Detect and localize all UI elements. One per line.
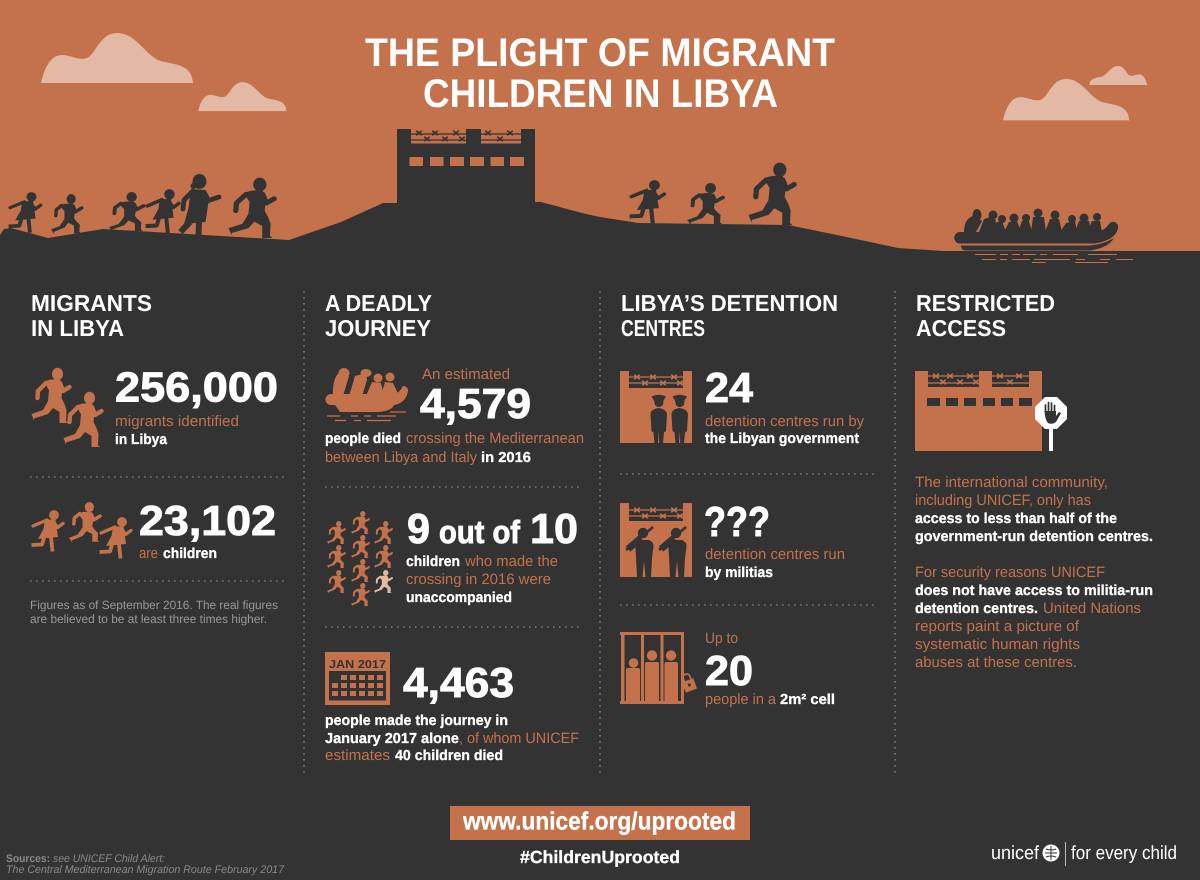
stat: 24: the Libyan government <box>705 431 859 447</box>
heading: a deadly journey: JOURNEY <box>325 315 431 341</box>
cloud: small right <box>1089 66 1147 85</box>
text: access limits: government-run detention centres. <box>915 529 1153 545</box>
stat: unknown: ??? <box>704 498 770 545</box>
stat: unknown: by militias <box>705 565 773 581</box>
stat: 24 <box>705 364 864 447</box>
text: access limits <box>915 474 1153 545</box>
panel: Libya's detention centres <box>620 290 864 708</box>
title <box>365 31 835 116</box>
heading: migrants in Libya: MIGRANTS <box>31 290 152 316</box>
unicef logo <box>991 842 1177 866</box>
icon: militia <box>620 503 692 577</box>
stat: 9 out of 10 <box>406 505 578 606</box>
text: security: United Nations <box>1043 600 1141 617</box>
stat: 20: 20 <box>705 647 753 694</box>
running family left <box>9 174 274 238</box>
icon: three running children <box>32 502 131 558</box>
url banner: www.unicef.org/uprooted <box>462 808 736 836</box>
stat: 24: 24 <box>705 364 754 411</box>
icon: small boat <box>326 368 408 420</box>
stat: unknown: detention centres run <box>705 546 845 563</box>
text: security: reports paint a picture of <box>915 618 1080 635</box>
stat: 4,463: estimates <box>325 747 390 764</box>
stat: 23,102 <box>139 497 276 562</box>
sources: The Central Mediterranean Migration Route February 2017 <box>6 864 285 876</box>
migrant boat <box>954 208 1133 262</box>
stat: 4,579: crossing the Mediterranean <box>406 430 584 447</box>
text: security: For security reasons UNICEF <box>915 564 1105 581</box>
stat: 24: detention centres run by <box>705 413 864 430</box>
column dividers <box>30 291 895 775</box>
stat: 20: people in a <box>705 691 777 708</box>
stat: unknown <box>704 498 845 581</box>
heading: restricted access: ACCESS <box>916 315 1006 341</box>
text: security: detention centres. <box>915 601 1038 617</box>
hashtag: #ChildrenUprooted <box>520 847 680 867</box>
stat: 4,463: 4,463 <box>403 659 514 706</box>
stat: 256,000: in Libya <box>115 432 168 448</box>
heading: detention centres <box>621 290 838 341</box>
icon: fortress with stop sign <box>915 371 1067 451</box>
stat: 4,579 <box>325 366 584 466</box>
title: CHILDREN IN LIBYA <box>423 72 778 116</box>
note: figures <box>30 598 278 626</box>
stat: 4,463: , of whom UNICEF <box>459 730 579 747</box>
cloud: large right <box>1003 79 1129 120</box>
stat: 23,102: 23,102 <box>139 497 276 544</box>
sources: Sources: <box>6 853 50 865</box>
stat: 4,463: people made the journey in <box>325 713 508 729</box>
panel: a deadly journey <box>325 290 584 764</box>
stat: 9 out of 10: children <box>406 554 460 570</box>
text: security: abuses at these centres. <box>915 654 1077 671</box>
text: security <box>915 564 1153 671</box>
text: security: systematic human rights <box>915 636 1080 653</box>
heading: detention centres: CENTRES <box>621 315 705 341</box>
sources: see UNICEF Child Alert: <box>53 853 165 865</box>
sky panel <box>0 0 1200 251</box>
stat: 23,102: children <box>163 546 217 562</box>
heading: a deadly journey <box>325 290 432 341</box>
text: access limits: The international community, <box>915 474 1108 491</box>
text: access limits: access to less than half of the <box>915 511 1117 527</box>
stat: 4,579: An estimated <box>422 366 510 383</box>
stat: 20 <box>705 630 835 708</box>
icon: two running adults <box>32 368 102 447</box>
heading: restricted access <box>916 290 1055 341</box>
running family right <box>630 163 794 225</box>
unicef logo: for every child <box>1071 843 1177 864</box>
stat: 4,579: in 2016 <box>481 450 531 466</box>
stat: 20: Up to <box>705 630 738 647</box>
note: figures: are believed to be at least three times higher. <box>30 612 267 626</box>
stat: 4,463 <box>325 659 579 764</box>
stat: 9 out of 10: 10 <box>530 505 578 552</box>
heading: migrants in Libya <box>31 290 152 341</box>
stat: 9 out of 10: 9 <box>407 505 430 552</box>
sources <box>6 853 285 876</box>
stat: 4,579: between Libya and Italy <box>325 449 477 466</box>
stat: 9 out of 10: out of <box>439 514 520 550</box>
stat: 9 out of 10: crossing in 2016 were <box>406 571 551 588</box>
title: THE PLIGHT OF MIGRANT <box>365 31 835 75</box>
cloud: small left <box>198 82 286 111</box>
heading: a deadly journey: A DEADLY <box>325 290 432 316</box>
stat: 256,000: migrants identified <box>115 413 239 430</box>
icon: calendar: JAN 2017 <box>329 659 386 671</box>
panel: restricted access <box>915 290 1153 671</box>
note: figures: Figures as of September 2016. The real figures <box>30 598 278 612</box>
stat: 4,463: 40 children died <box>395 748 503 764</box>
heading: restricted access: RESTRICTED <box>916 290 1055 316</box>
icon: calendar <box>325 652 390 705</box>
stat: 4,579: people died <box>325 431 401 447</box>
stat: 4,579: 4,579 <box>420 380 531 427</box>
stat: 20: 2m² cell <box>780 692 835 708</box>
cloud: large left <box>41 33 193 83</box>
unicef logo: unicef <box>991 843 1040 864</box>
stat: 256,000 <box>115 364 278 448</box>
text: security: does not have access to militia-run <box>915 583 1153 599</box>
stat: 9 out of 10: unaccompanied <box>406 590 512 606</box>
stat: 4,463: January 2017 alone <box>325 731 459 747</box>
heading: detention centres: LIBYA’S DETENTION <box>621 290 838 316</box>
stat: 9 out of 10: who made the <box>464 553 558 570</box>
stat: 23,102: are <box>139 545 158 562</box>
icon: prison cell <box>620 632 697 704</box>
detention tower <box>397 129 535 205</box>
stat: 256,000: 256,000 <box>115 364 278 410</box>
heading: migrants in Libya: IN LIBYA <box>31 315 124 341</box>
icon: ten running children <box>327 511 392 607</box>
panel: migrants in Libya <box>30 290 278 626</box>
icon: government guards <box>620 371 692 443</box>
text: access limits: including UNICEF, only has <box>915 492 1091 509</box>
